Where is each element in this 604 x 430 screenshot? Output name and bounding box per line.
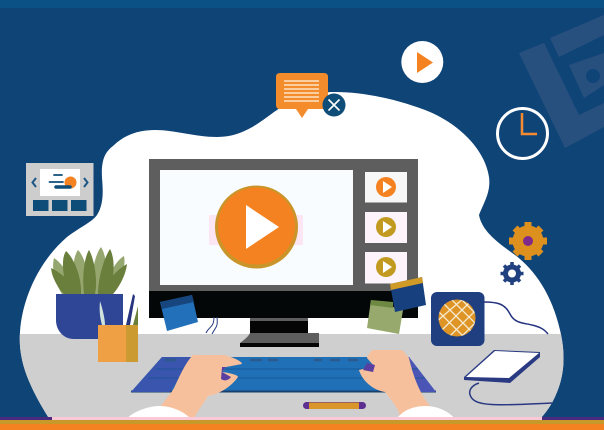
sticky note: blue bbox=[160, 295, 198, 331]
monitor stand bbox=[240, 317, 319, 347]
monitor bbox=[149, 159, 418, 347]
monitor chin bbox=[149, 291, 418, 318]
watermark logo bbox=[519, 15, 604, 148]
big play button bbox=[209, 186, 303, 268]
leaves bbox=[51, 247, 127, 294]
pencil cup bbox=[98, 294, 138, 362]
pot bbox=[56, 294, 123, 339]
desk bbox=[20, 334, 564, 417]
gear: orange bbox=[509, 222, 547, 260]
slideshow card bbox=[26, 163, 94, 216]
monitor bezel bbox=[149, 159, 418, 292]
tablet cable bbox=[470, 383, 552, 405]
speaker bbox=[431, 292, 484, 346]
speaker cable bbox=[484, 302, 548, 334]
floating play icon bbox=[401, 41, 443, 83]
pen bbox=[303, 402, 366, 409]
top strip bbox=[0, 0, 604, 8]
bottom bar bbox=[0, 417, 604, 430]
gear: navy bbox=[500, 262, 524, 285]
keyboard bbox=[131, 357, 436, 392]
close icon bbox=[322, 94, 346, 116]
thumbnail 2 bbox=[365, 212, 407, 243]
thumbnail 3 bbox=[365, 252, 407, 284]
tablet bbox=[464, 350, 540, 383]
screen bbox=[160, 170, 353, 285]
plant bbox=[51, 247, 127, 339]
left hand bbox=[125, 355, 242, 420]
thumbnail 1 bbox=[365, 172, 407, 202]
chat bubble bbox=[276, 73, 328, 118]
monitor cables bbox=[206, 317, 217, 334]
sticky note: navy bbox=[390, 277, 426, 312]
sticky note: green bbox=[367, 300, 403, 334]
clock icon bbox=[498, 108, 548, 158]
white blob bbox=[20, 92, 564, 420]
pens bbox=[100, 294, 138, 325]
right hand bbox=[359, 350, 456, 420]
